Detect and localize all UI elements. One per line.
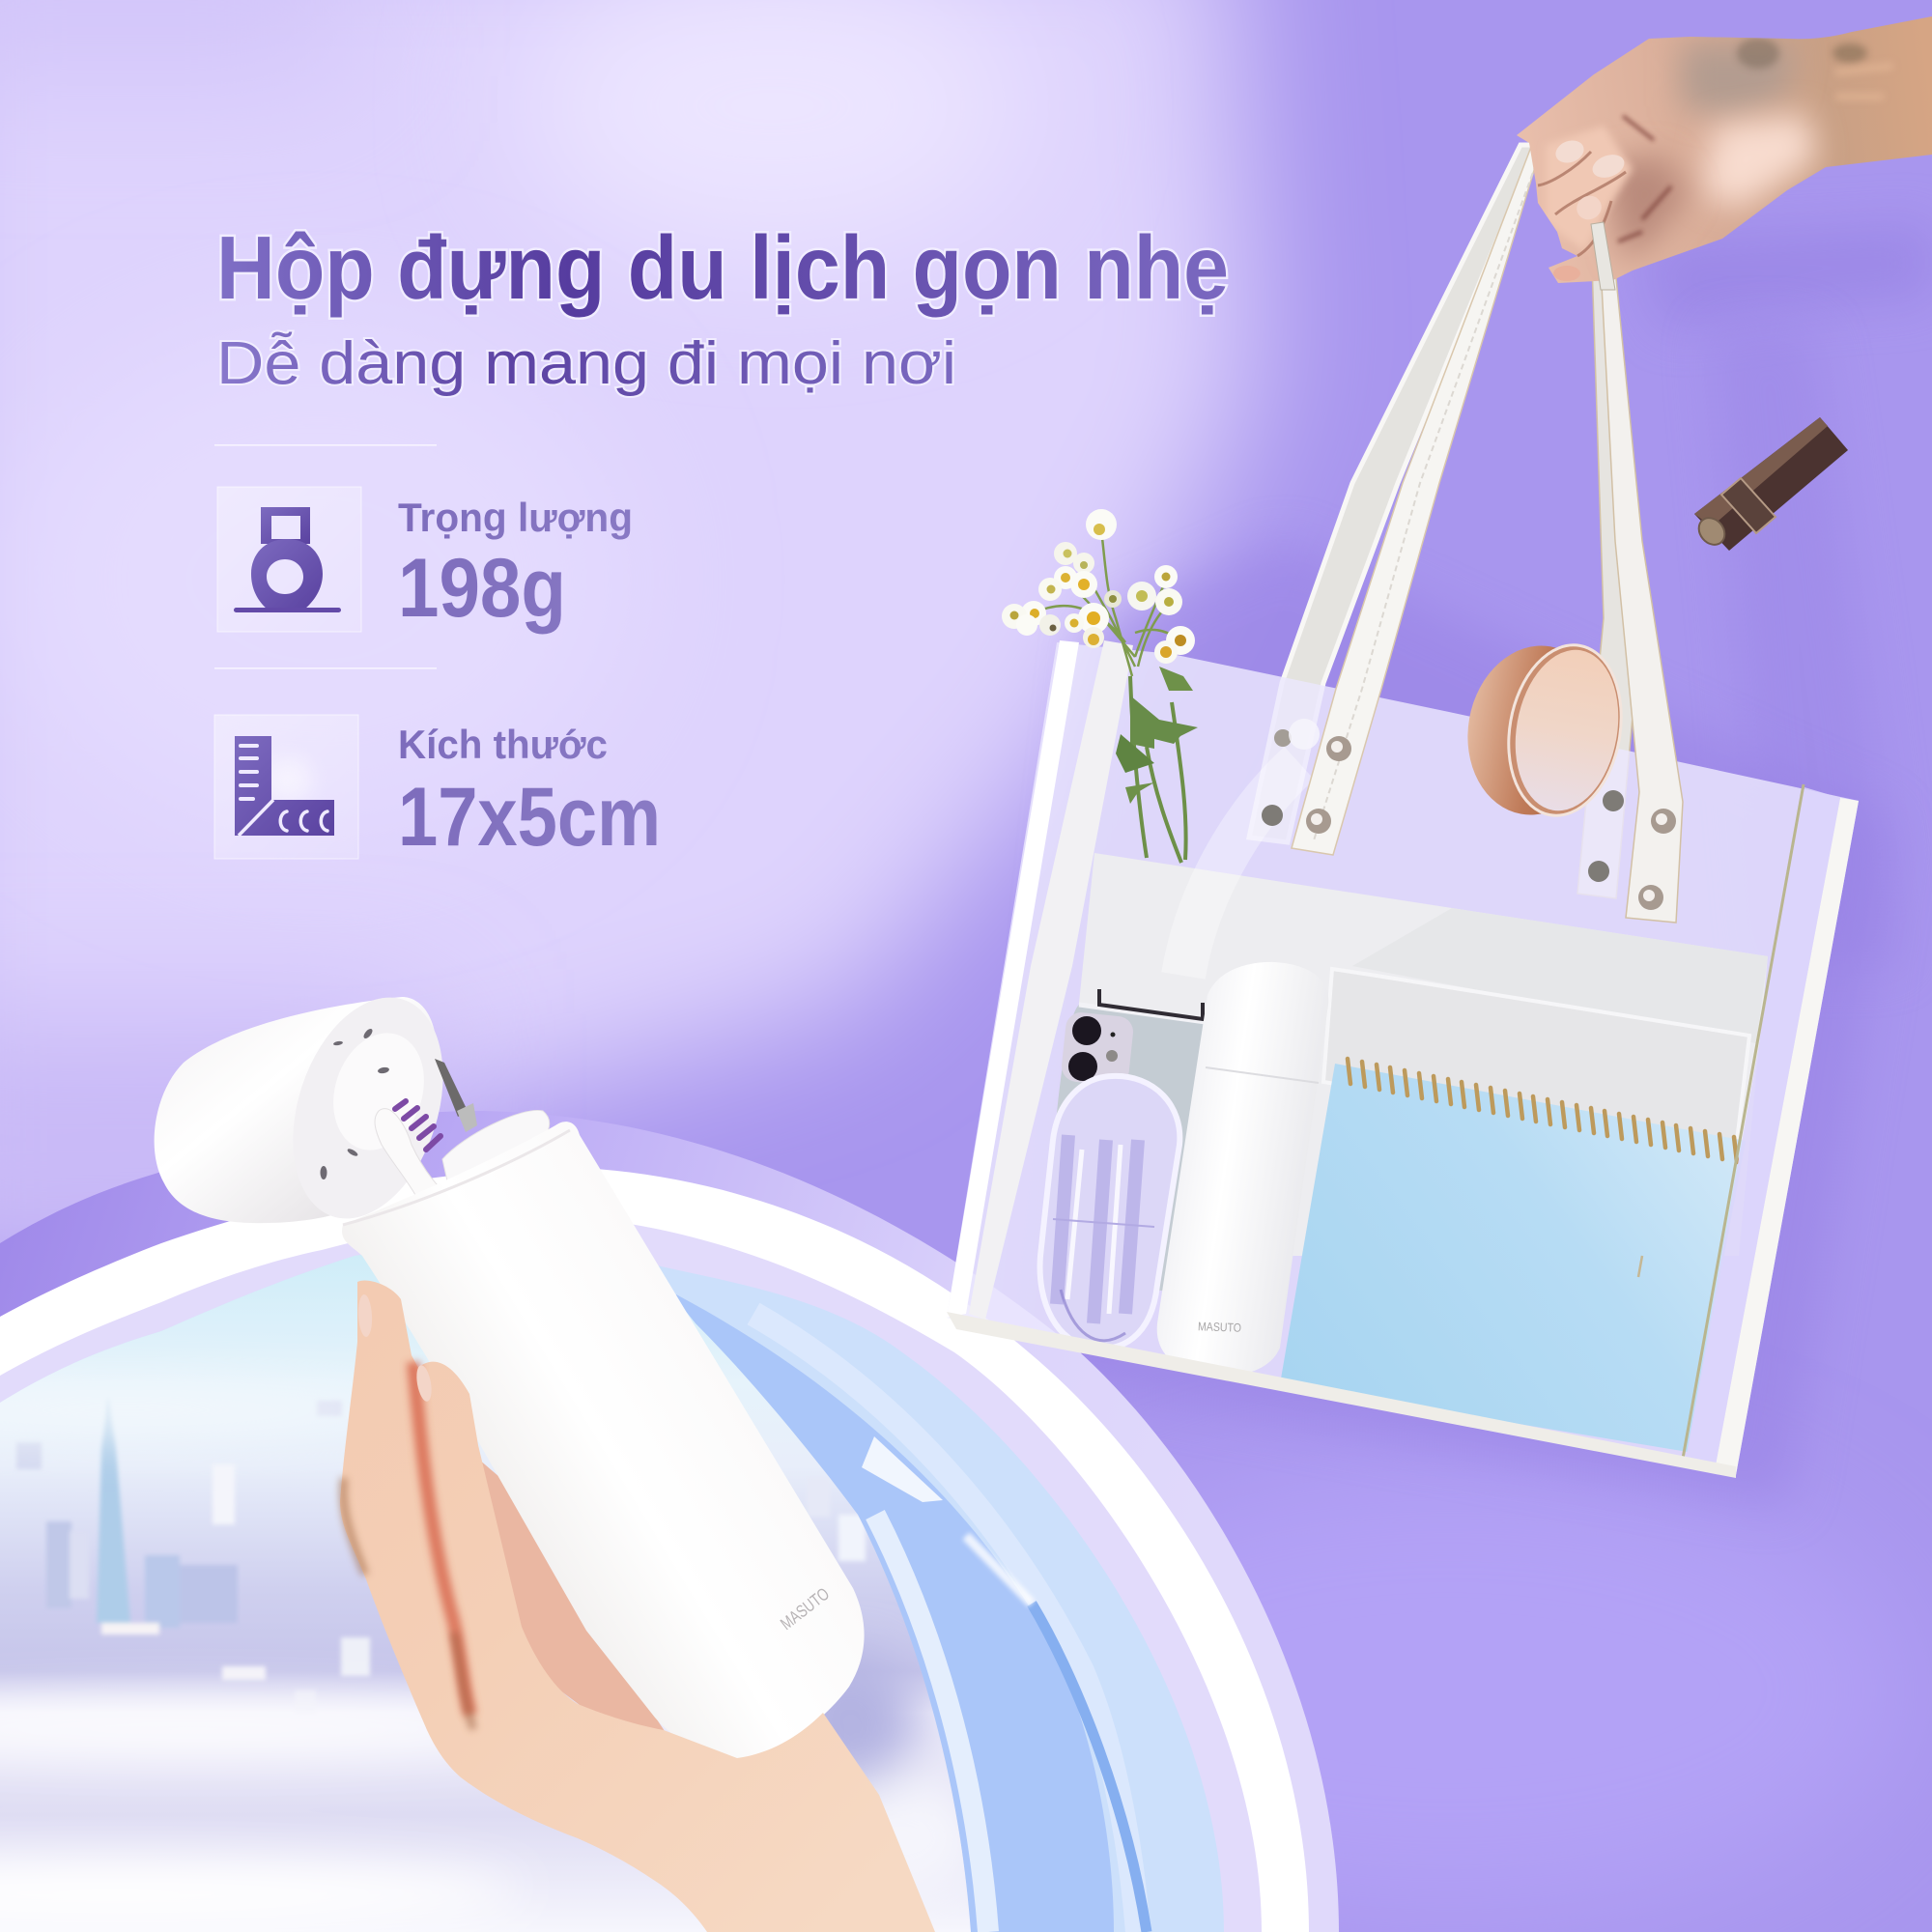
bottle body — [342, 1122, 865, 1760]
white case product in bag: MASUTO — [1198, 1320, 1241, 1335]
subtitle: Dễ dàng mang đi mọi nơi — [216, 330, 956, 397]
porthole arch with city view — [0, 1111, 1339, 1932]
inner paper insert — [1053, 853, 1768, 1256]
title: Hộp đựng du lịch gọn nhẹ — [216, 217, 1229, 318]
hand shading — [1538, 38, 1893, 261]
specification block: size — [214, 668, 661, 864]
bag left handle back strap — [1249, 145, 1536, 842]
finger shadow — [413, 1362, 470, 1715]
inner lavender ring — [0, 1218, 1262, 1932]
outer lavender ring — [0, 1111, 1339, 1932]
white case product in bag — [1157, 962, 1328, 1376]
size value: 17x5cm — [398, 771, 661, 864]
compact powder — [1455, 635, 1634, 826]
periwinkle inner band — [676, 1294, 1114, 1932]
insert inside bottle — [442, 1110, 550, 1203]
strap passing thumb — [1591, 222, 1615, 290]
holding hand, bottom left — [340, 1281, 935, 1932]
back of palm under bottle — [478, 1459, 676, 1777]
bag right handle back strap — [1577, 232, 1634, 898]
clouds — [0, 1387, 985, 1928]
glass reflection shard — [862, 1436, 943, 1502]
lipstick — [1693, 417, 1848, 551]
icon: kettlebell weight — [217, 487, 361, 632]
weight label: Trọng lượng — [398, 495, 633, 540]
skyline — [16, 1396, 866, 1714]
fingernails — [357, 1294, 373, 1337]
weight value: 198g — [398, 542, 566, 635]
specification block: weight — [214, 444, 633, 635]
left side strips — [947, 640, 1079, 1318]
size label: Kích thước — [398, 722, 608, 767]
fingernails — [1552, 137, 1587, 166]
white ring — [0, 1169, 1309, 1932]
grey pouch — [1323, 969, 1749, 1150]
bottom edge — [947, 1312, 1736, 1478]
sky and city — [0, 1246, 985, 1932]
flower stems and leaves — [1034, 529, 1198, 863]
product bottle and lid — [155, 979, 865, 1760]
purple brush — [395, 1101, 440, 1150]
holding hand, top right — [1517, 16, 1932, 290]
transparent body — [947, 642, 1859, 1475]
bag left handle front strap — [1262, 145, 1542, 855]
notebook spiral — [1348, 1059, 1737, 1162]
tote bag — [947, 145, 1859, 1478]
flowers — [1002, 509, 1195, 664]
blue glass ring — [0, 1246, 1224, 1932]
bag right handle front strap — [1588, 230, 1683, 923]
clear accessory case — [1040, 1076, 1179, 1349]
bottle body: MASUTO — [777, 1584, 833, 1634]
dark blue streak — [1032, 1604, 1147, 1932]
notebook — [1280, 1059, 1746, 1452]
icon: set square ruler — [214, 715, 358, 859]
metal tweezer — [435, 1059, 477, 1132]
lid — [155, 979, 469, 1237]
right side strip — [1715, 798, 1859, 1475]
phone — [1050, 989, 1206, 1294]
white spoon tool — [375, 1109, 454, 1219]
translucent film fold — [1183, 763, 1299, 976]
